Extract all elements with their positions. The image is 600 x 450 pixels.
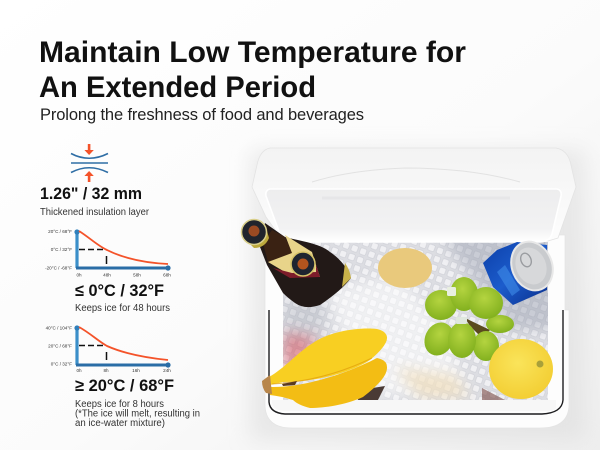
icon: insulation layer compression bbox=[71, 144, 108, 182]
green grapes bbox=[419, 277, 514, 361]
temperature heading: at or below 0°C: ≤ 0°C / 32°F bbox=[75, 281, 164, 300]
insulation thickness value: 1.26" / 32 mm bbox=[40, 185, 142, 203]
beer bottle bbox=[242, 220, 351, 307]
soda can bbox=[483, 235, 560, 305]
cooler body bbox=[265, 235, 569, 428]
bananas bbox=[262, 329, 387, 408]
chart: cooling curve to 0°C: 48h bbox=[103, 272, 111, 278]
chart: cooling curve to 0°C bbox=[45, 229, 171, 278]
ice duration note bbox=[75, 399, 200, 429]
insulation caption: Thickened insulation layer bbox=[40, 207, 150, 218]
ice duration: 48 hours: Keeps ice for 48 hours bbox=[75, 303, 170, 314]
cooler illustration bbox=[242, 148, 585, 440]
ice duration note: (*The ice will melt, resulting in bbox=[75, 408, 200, 420]
lid bbox=[252, 148, 576, 242]
ice filled compartment bbox=[283, 232, 558, 400]
lemon bbox=[489, 339, 553, 399]
ice duration note: Keeps ice for 8 hours bbox=[75, 399, 164, 410]
chart: cooling curve to 0°C: 20°C / 68°F bbox=[48, 229, 72, 234]
pastry bun bbox=[378, 248, 432, 288]
chart: cooling curve to 0°C: 0°C / 32°F bbox=[51, 247, 72, 252]
chart: warming curve at 20°C: 20°C / 68°F bbox=[48, 344, 72, 348]
title: Maintain Low Temperature for bbox=[39, 36, 466, 69]
chart: warming curve at 20°C: 0°C / 32°F bbox=[51, 362, 72, 366]
chart: warming curve at 20°C: 16h bbox=[132, 368, 140, 373]
chart: warming curve at 20°C: 40°C / 104°F bbox=[46, 326, 72, 330]
ice duration note: an ice-water mixture) bbox=[75, 418, 165, 429]
title: An Extended Period bbox=[39, 71, 316, 104]
chart: warming curve at 20°C bbox=[46, 325, 171, 373]
cooler shadow bbox=[250, 150, 585, 440]
chart: warming curve at 20°C: 24h bbox=[163, 368, 171, 373]
chart: warming curve at 20°C: 0h bbox=[76, 368, 82, 373]
chart: cooling curve to 0°C: 68h bbox=[163, 272, 171, 278]
subtitle: Prolong the freshness of food and beverages bbox=[40, 106, 364, 124]
chart: warming curve at 20°C: 8h bbox=[103, 368, 109, 373]
chart: cooling curve to 0°C: 0h bbox=[76, 272, 82, 278]
title bbox=[39, 36, 466, 104]
chart: cooling curve to 0°C: 58h bbox=[133, 272, 141, 278]
chart: cooling curve to 0°C: -20°C / -68°F bbox=[45, 266, 72, 270]
temperature heading: at or above 20°C: ≥ 20°C / 68°F bbox=[75, 376, 174, 395]
